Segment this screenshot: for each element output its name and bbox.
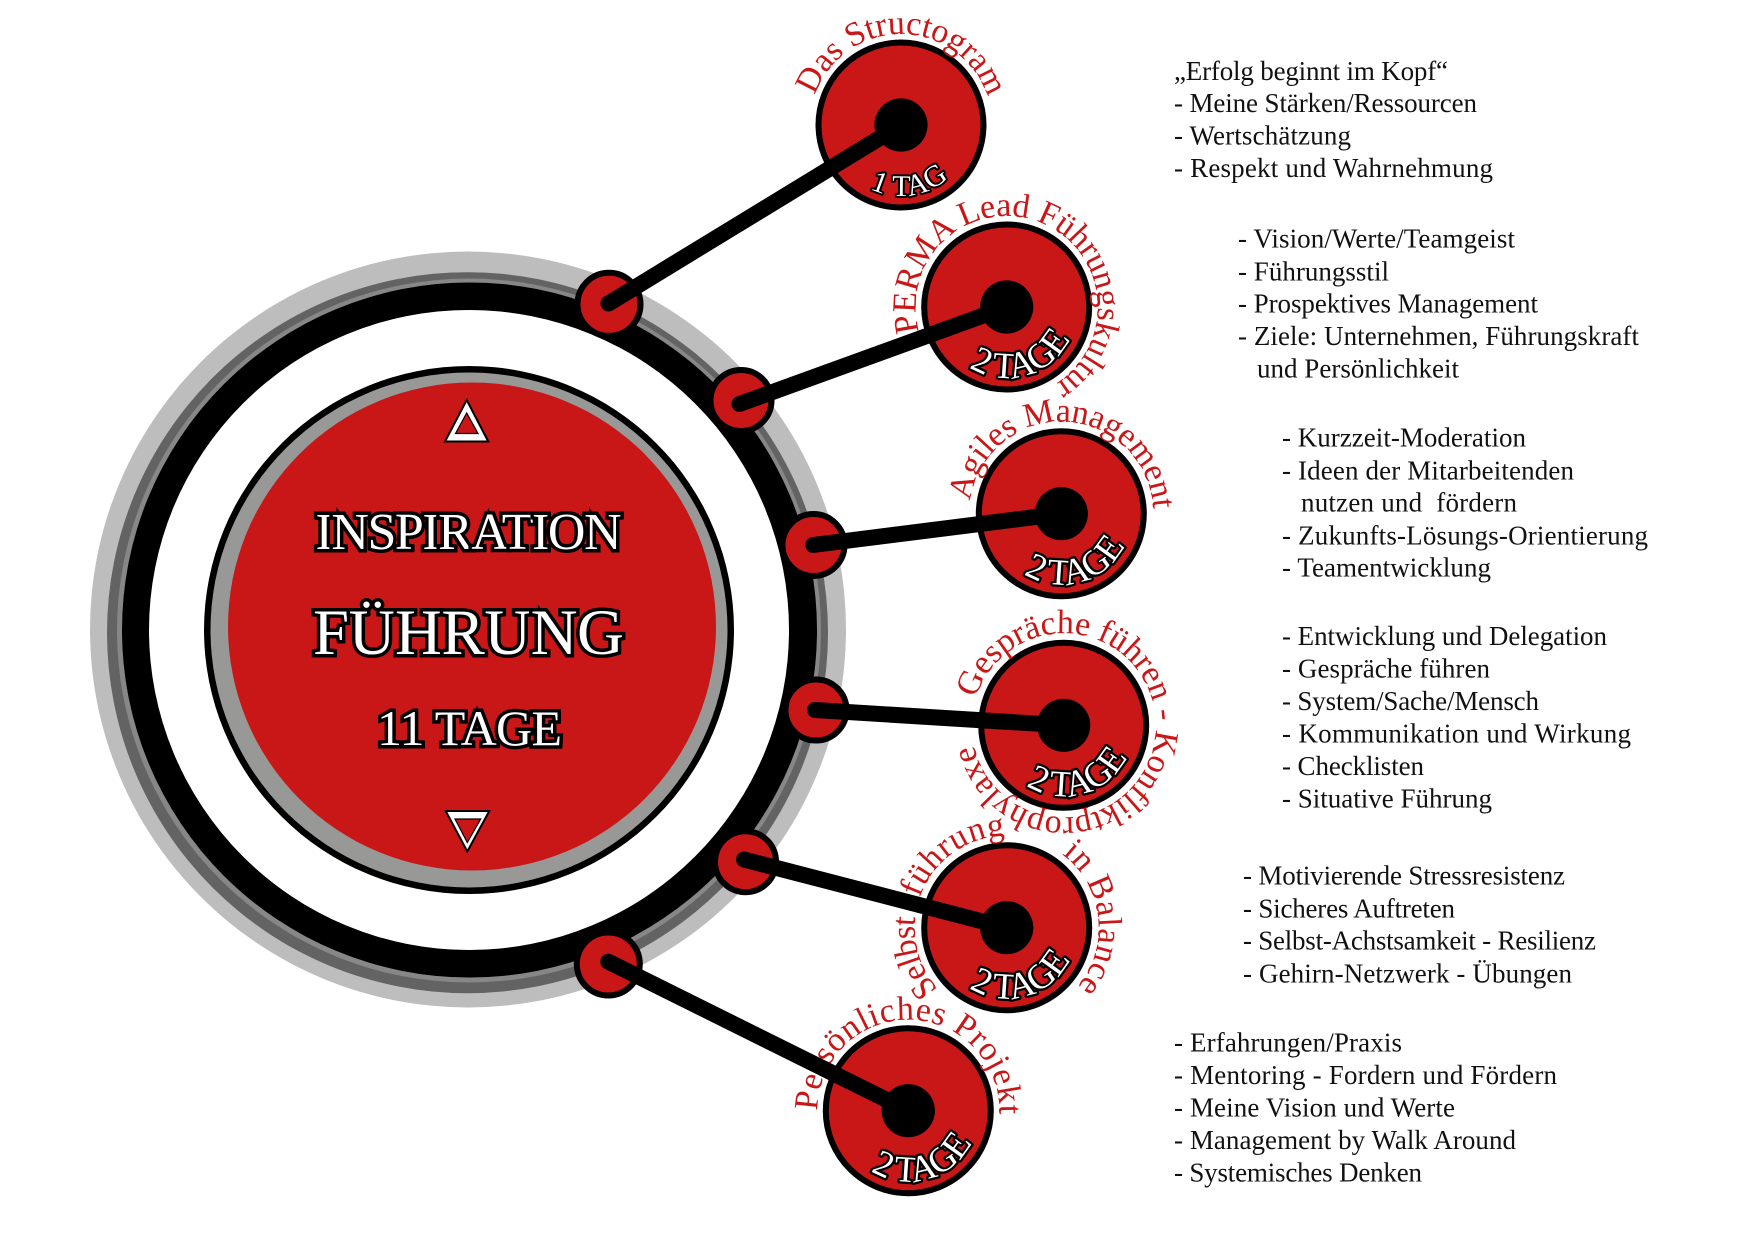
text block: agile topics: - Teamentwicklung bbox=[1282, 553, 1491, 583]
text block: project topics: - Management by Walk Around bbox=[1174, 1125, 1516, 1155]
curved label: Selbstführung in Balance: führung bbox=[900, 818, 1004, 896]
text block: agile topics: - Ideen der Mitarbeitenden bbox=[1282, 455, 1574, 485]
text block: PERMA topics: - Führungsstil bbox=[1238, 256, 1389, 286]
duration: 1 TAG: 1 TAG bbox=[870, 162, 948, 198]
text block: project topics: - Systemisches Denken bbox=[1174, 1158, 1422, 1188]
text block: PERMA topics: - Prospektives Management bbox=[1238, 289, 1538, 319]
text block: self-leadership topics: - Selbst-Achstsamkeit - Resilienz bbox=[1243, 925, 1596, 955]
text block: conversation topics: - Gespräche führen bbox=[1282, 654, 1490, 684]
text block: PERMA topics bbox=[1238, 223, 1639, 384]
curved label: PERMA Lead Führungskultur: PERMA Lead Führungskultur bbox=[893, 194, 1120, 398]
text block: Structogram topics: - Wertschätzung bbox=[1174, 120, 1351, 150]
curved label: Gespräche führen - Konfliktprophylaxe: Gespräche führen - Konfliktprophylaxe bbox=[958, 610, 1178, 834]
central disc bbox=[204, 366, 734, 894]
text block: agile topics: - Kurzzeit-Moderation bbox=[1282, 423, 1526, 453]
text block: project topics bbox=[1174, 1028, 1558, 1188]
icon: up triangle bbox=[445, 400, 488, 442]
text block: conversation topics: - System/Sache/Mensch bbox=[1282, 686, 1540, 716]
title: 11 tage: 11 TAGE bbox=[377, 700, 562, 756]
curved label: Persönliches Projekt: Persönliches Projekt bbox=[794, 996, 1021, 1114]
text block: self-leadership topics bbox=[1243, 860, 1596, 988]
text block: project topics: - Mentoring - Fordern und Fördern bbox=[1174, 1060, 1558, 1090]
text block: PERMA topics: und Persönlichkeit bbox=[1257, 354, 1459, 384]
text block: PERMA topics: - Ziele: Unternehmen, Führungskraft bbox=[1238, 321, 1639, 351]
text block: Structogram topics bbox=[1174, 56, 1493, 183]
icon: down triangle bbox=[446, 811, 489, 852]
text block: conversation topics bbox=[1282, 621, 1631, 814]
duration: 2 TAGE agile: 2 TAGE bbox=[1022, 532, 1127, 588]
curved label: Agiles Management: Agiles Management bbox=[950, 399, 1172, 509]
text block: agile topics: - Zukunfts-Lösungs-Orientierung bbox=[1282, 520, 1648, 550]
text block: project topics: - Erfahrungen/Praxis bbox=[1174, 1028, 1402, 1058]
text block: conversation topics: - Entwicklung und Delegation bbox=[1282, 621, 1608, 651]
text block: PERMA topics: - Vision/Werte/Teamgeist bbox=[1238, 223, 1515, 253]
duration: 2 TAGE projekt: 2 TAGE bbox=[870, 1129, 974, 1185]
text block: self-leadership topics: - Motivierende Stressresistenz bbox=[1243, 860, 1565, 890]
outer ring system bbox=[90, 252, 846, 1008]
text block: agile topics: nutzen und fördern bbox=[1301, 488, 1518, 518]
curved label: Das Structogram: Das Structogram bbox=[794, 18, 1001, 96]
text block: conversation topics: - Situative Führung bbox=[1282, 784, 1492, 814]
module discs bbox=[818, 42, 1146, 1193]
curved label: Selbstführung in Balance: Selbst bbox=[894, 916, 936, 999]
connector nodes on ring bbox=[577, 273, 846, 996]
text block: Structogram topics: - Respekt und Wahrnehmung bbox=[1174, 153, 1493, 183]
text block: self-leadership topics: - Sicheres Auftreten bbox=[1243, 894, 1456, 924]
text block: project topics: - Meine Vision und Werte bbox=[1174, 1093, 1455, 1123]
text block: conversation topics: - Checklisten bbox=[1282, 751, 1424, 781]
title: führung: FÜHRUNG bbox=[313, 597, 624, 669]
connector lines with hubs bbox=[608, 98, 1090, 1137]
duration: 2 TAGE gespräche: 2 TAGE bbox=[1024, 744, 1129, 800]
curved label: Selbstführung in Balance: in Balance bbox=[1062, 839, 1122, 993]
curved label: Selbstführung in Balance bbox=[894, 818, 1122, 999]
text block: agile topics bbox=[1282, 423, 1648, 583]
duration: 2 TAGE selbstführung: 2 TAGE bbox=[968, 946, 1072, 1002]
text block: Structogram topics: - Meine Stärken/Ressourcen bbox=[1174, 88, 1478, 118]
duration: 2 TAGE perma: 2 TAGE bbox=[968, 326, 1072, 382]
title: inspiration: INSPIRATION bbox=[316, 504, 622, 561]
text block: conversation topics: - Kommunikation und Wirkung bbox=[1282, 719, 1631, 749]
text block: self-leadership topics: - Gehirn-Netzwerk - Übungen bbox=[1243, 958, 1572, 988]
text block: Structogram topics: „Erfolg beginnt im Kopf“ bbox=[1174, 56, 1448, 86]
